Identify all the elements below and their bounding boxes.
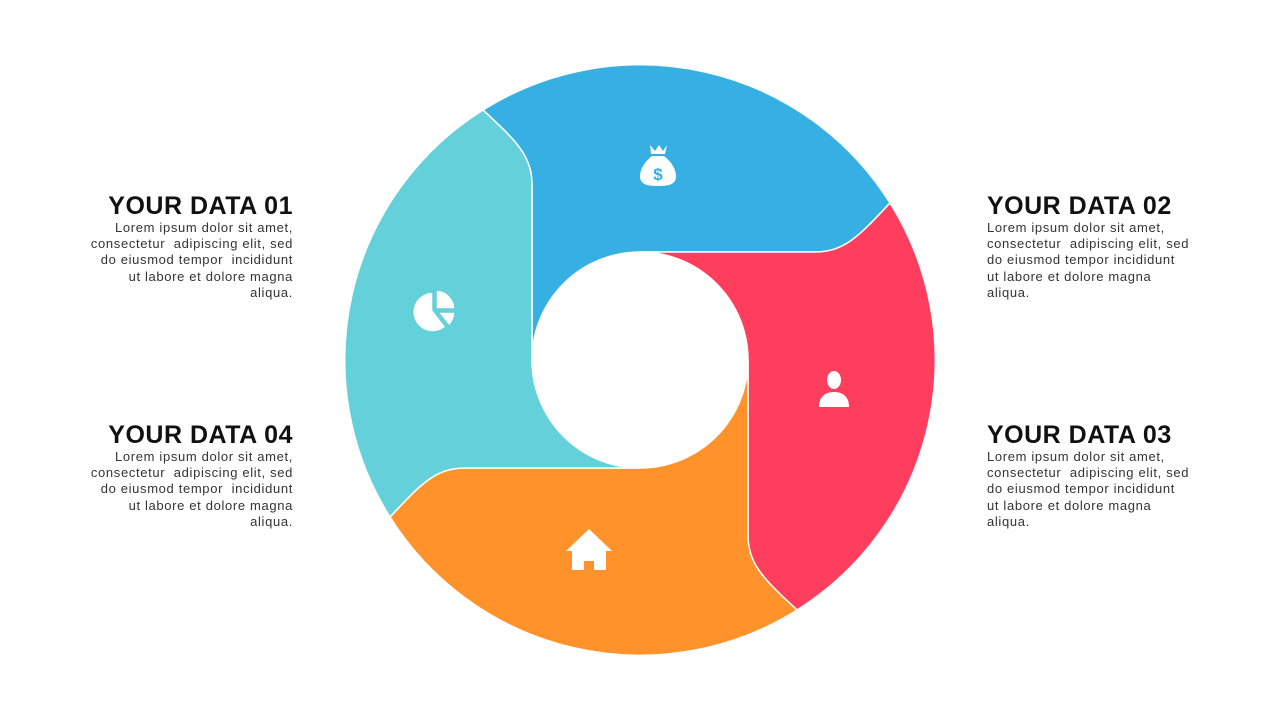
icon: person <box>819 371 849 407</box>
icon: house <box>566 529 612 570</box>
text block: data 04: Lorem ipsum dolor sit amet, <box>115 449 293 464</box>
segment: red <box>640 203 935 610</box>
text block: data 01: do eiusmod tempor incididunt <box>101 252 293 267</box>
text block: data 03: do eiusmod tempor incididunt <box>987 481 1175 496</box>
text block: data 03 <box>987 421 1189 529</box>
text block: data 01: aliqua. <box>250 285 293 300</box>
text block: data 02: YOUR DATA 02 <box>987 192 1172 220</box>
segment: orange <box>390 360 797 655</box>
text block: data 01: ut labore et dolore magna <box>129 269 293 284</box>
text block: data 02: consectetur adipiscing elit, sed <box>987 236 1189 251</box>
text block: data 03: Lorem ipsum dolor sit amet, <box>987 449 1165 464</box>
text block: data 04: ut labore et dolore magna <box>129 498 293 513</box>
text block: data 04: do eiusmod tempor incididunt <box>101 481 293 496</box>
icon: pie chart <box>413 290 455 332</box>
text block: data 04 <box>91 421 293 529</box>
text block: data 01: Lorem ipsum dolor sit amet, <box>115 220 293 235</box>
text block: data 02: do eiusmod tempor incididunt <box>987 252 1175 267</box>
text block: data 04: YOUR DATA 04 <box>108 421 293 449</box>
segment: teal <box>345 110 640 517</box>
text block: data 03: ut labore et dolore magna <box>987 498 1151 513</box>
text block: data 03: consectetur adipiscing elit, sed <box>987 465 1189 480</box>
text block: data 02: aliqua. <box>987 285 1030 300</box>
text block: data 01: YOUR DATA 01 <box>108 192 293 220</box>
text block: data 01: consectetur adipiscing elit, sed <box>91 236 293 251</box>
text block: data 03: aliqua. <box>987 514 1030 529</box>
icon: money bag: $ <box>653 165 663 184</box>
segment: blue <box>483 65 890 360</box>
text block: data 04: aliqua. <box>250 514 293 529</box>
text block: data 02: Lorem ipsum dolor sit amet, <box>987 220 1165 235</box>
text block: data 02: ut labore et dolore magna <box>987 269 1151 284</box>
icon: money bag <box>640 145 676 186</box>
text block: data 03: YOUR DATA 03 <box>987 421 1172 449</box>
text block: data 04: consectetur adipiscing elit, sed <box>91 465 293 480</box>
text block: data 02 <box>987 192 1189 300</box>
text block: data 01 <box>91 192 293 300</box>
